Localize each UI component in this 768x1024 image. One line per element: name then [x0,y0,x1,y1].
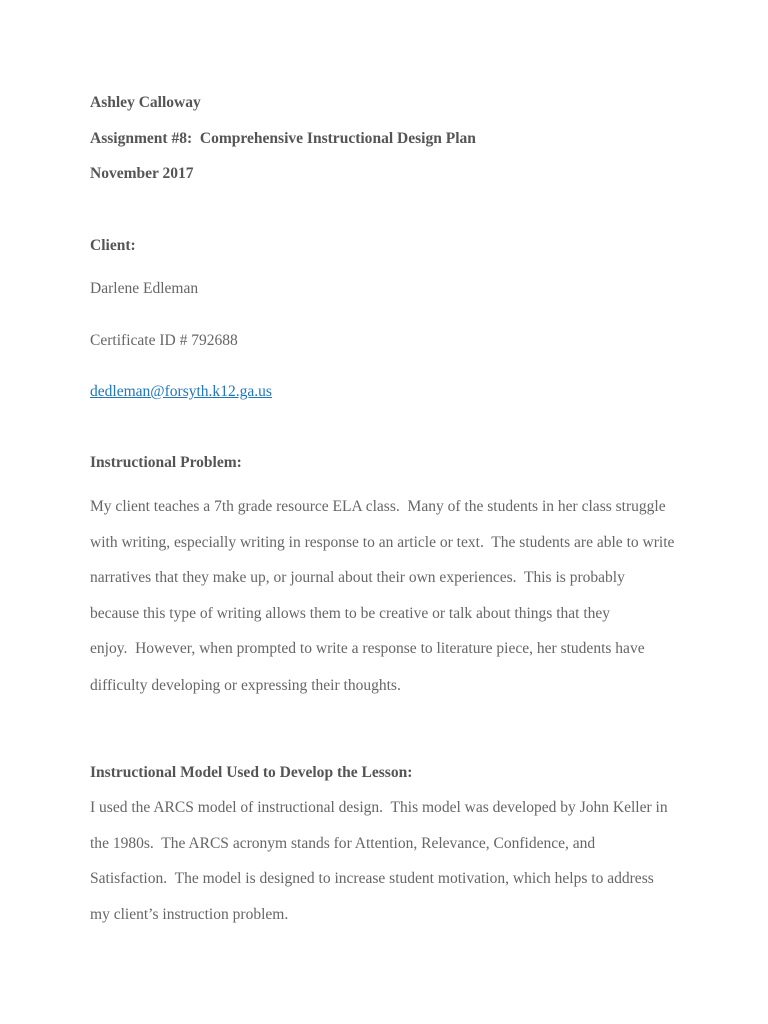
text block: instructional problem paragraph: enjoy. However, when prompted to write a response to literature piece, her students have [90,640,645,657]
text block: client details: Darlene Edleman [90,280,198,297]
text block: client details: dedleman@forsyth.k12.ga.us [90,383,272,400]
text block: instructional model paragraph [90,799,668,923]
text block: instructional model paragraph: my client’s instruction problem. [90,906,288,923]
heading: author, assignment and date: Assignment #8: Comprehensive Instructional Design Plan [90,130,476,147]
text block: instructional problem paragraph: My client teaches a 7th grade resource ELA class. Many of the students in her class struggle [90,498,666,515]
heading: instructional model: Instructional Model Used to Develop the Lesson: [90,764,412,781]
text block: client details [90,280,272,400]
text block: instructional problem paragraph: because this type of writing allows them to be creative or talk about things that they [90,605,610,622]
text block: instructional model paragraph: I used the ARCS model of instructional design. This model was developed by John Keller in [90,799,668,816]
heading: author, assignment and date: Ashley Calloway [90,94,201,111]
text block: instructional model paragraph: Satisfaction. The model is designed to increase student motivation, which helps to address [90,870,654,887]
text block: client details: Certificate ID # 792688 [90,332,238,349]
text block: instructional problem paragraph: difficulty developing or expressing their thoughts. [90,677,401,694]
text block: instructional problem paragraph: narratives that they make up, or journal about their own experiences. This is probably [90,569,625,586]
text block: instructional problem paragraph: with writing, especially writing in response to an article or text. The students are able to write [90,534,674,551]
heading: author, assignment and date [90,94,476,182]
text block: instructional problem paragraph [90,498,674,694]
heading: instructional problem: Instructional Problem: [90,454,242,471]
text block: instructional model paragraph: the 1980s. The ARCS acronym stands for Attention, Relevance, Confidence, and [90,835,595,852]
heading: client: Client: [90,237,136,254]
heading: author, assignment and date: November 2017 [90,165,194,182]
